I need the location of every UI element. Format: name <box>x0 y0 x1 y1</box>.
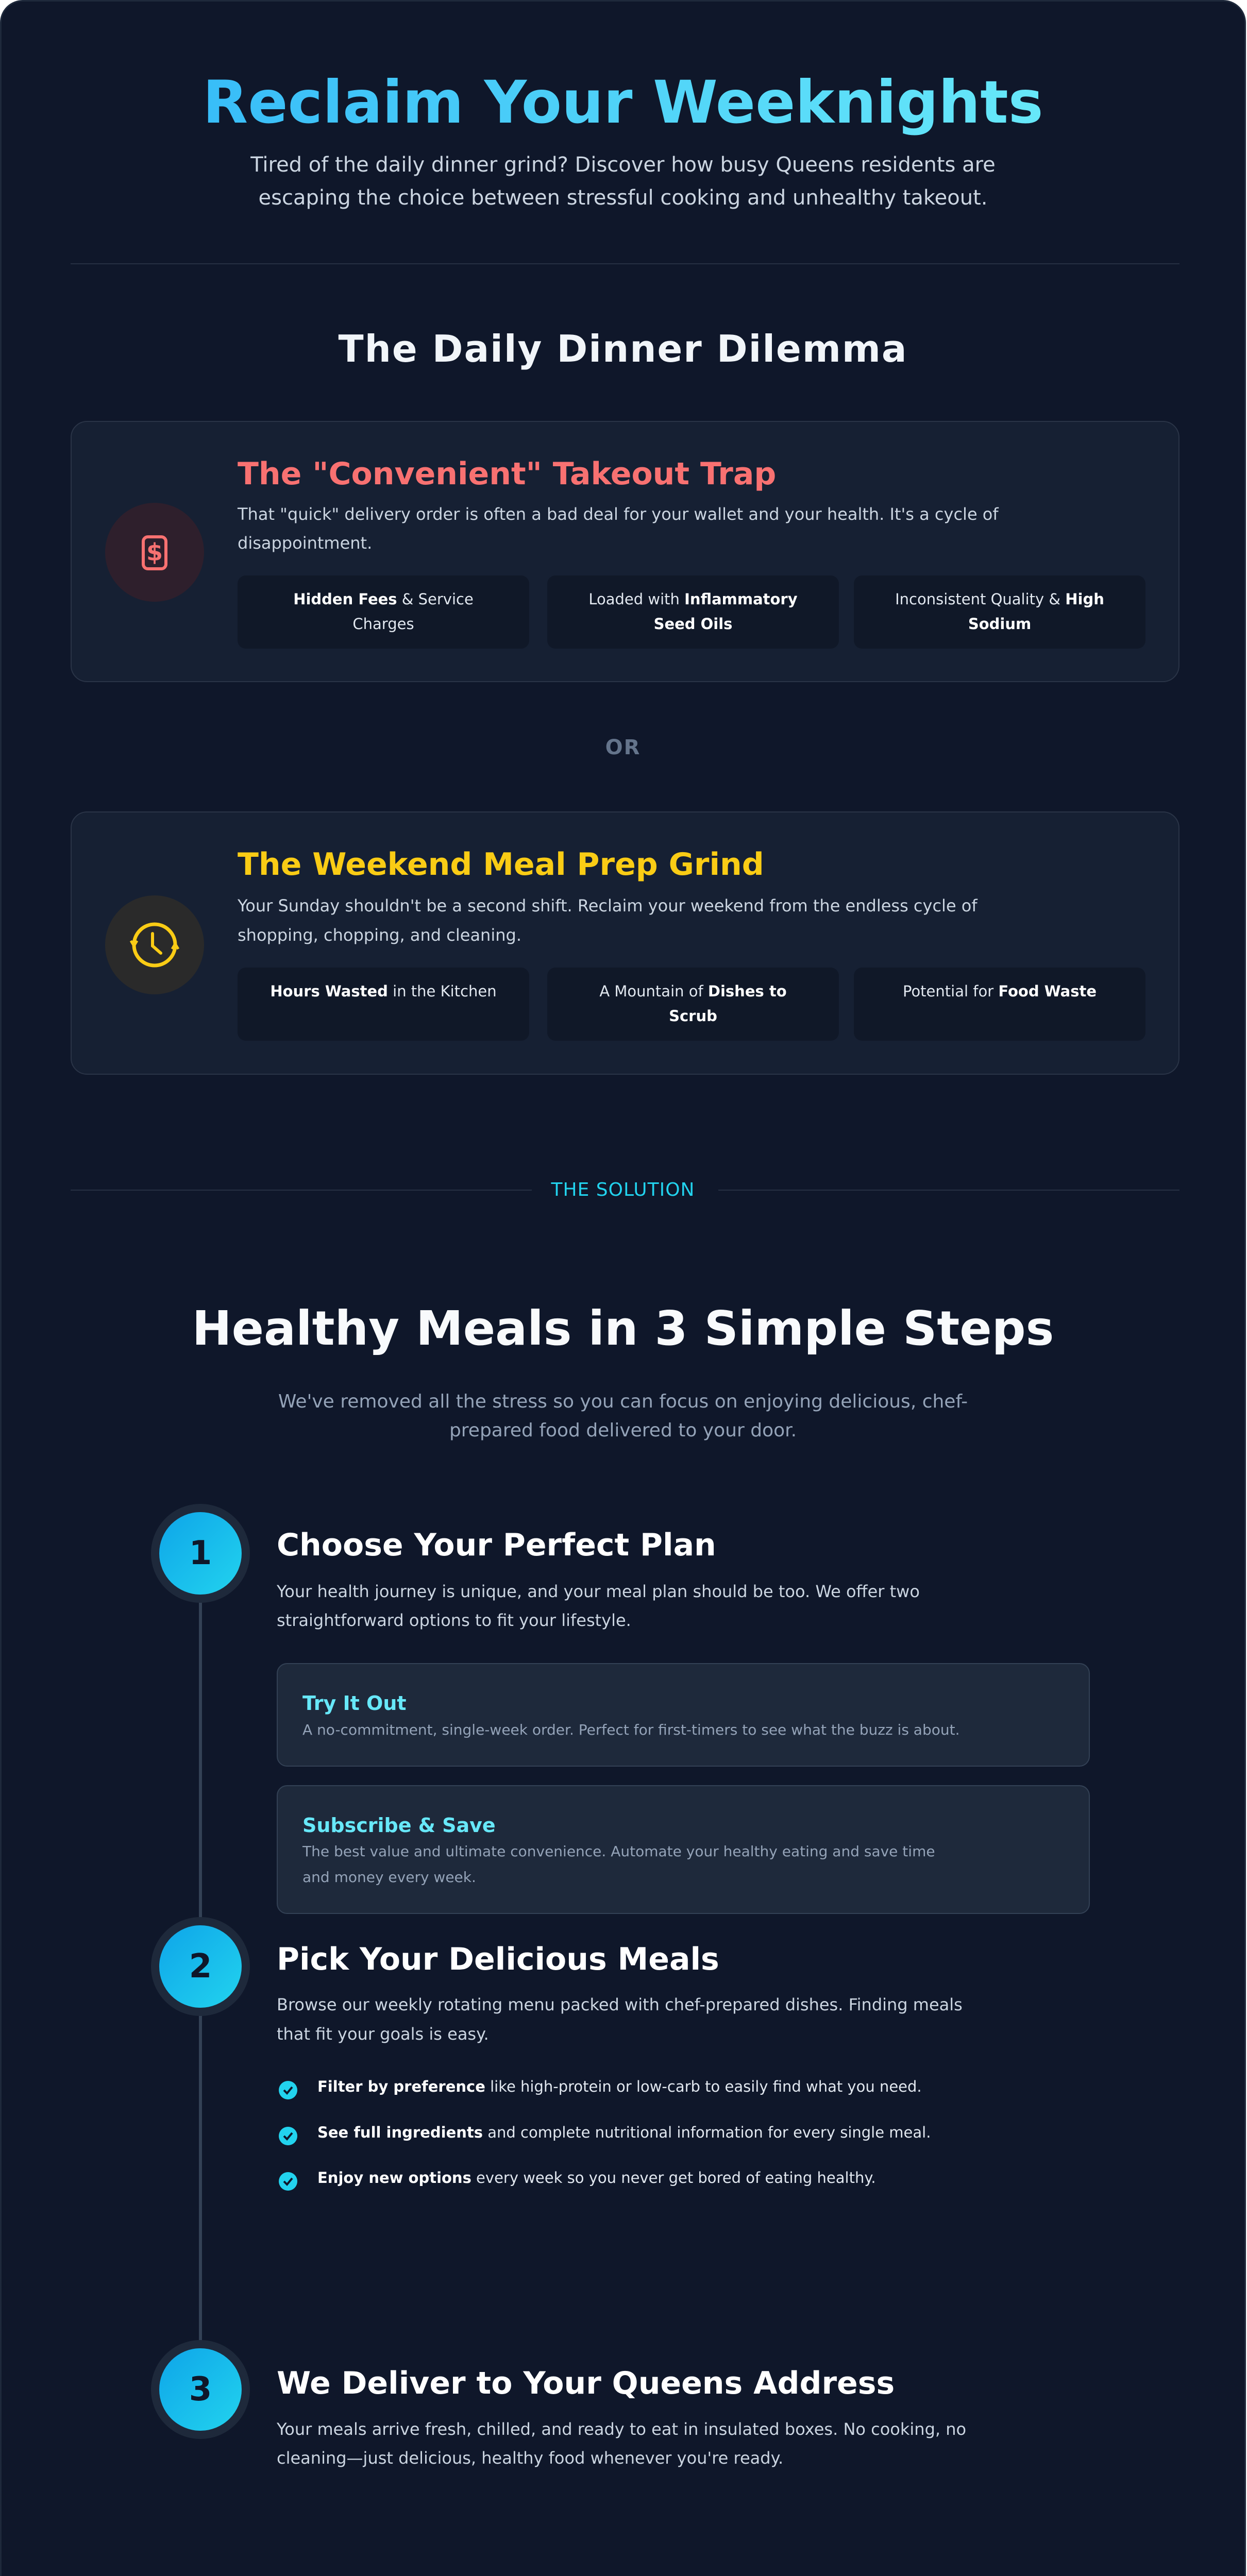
step 3 title: We Deliver to Your Queens Address <box>277 2365 895 2401</box>
pill: dishes: A Mountain of Dishes to <box>599 982 787 1000</box>
card text: That "quick" delivery order is often a bad deal for your wallet and your health. It's a cycle of <box>238 504 999 524</box>
steps subtitle: We've removed all the stress so you can focus on enjoying delicious, chef- <box>278 1391 968 1412</box>
card text: shopping, chopping, and cleaning. <box>238 925 521 945</box>
pill: waste: Potential for Food Waste <box>903 982 1097 1000</box>
step 3 <box>151 2340 966 2468</box>
option: subscribe: Subscribe & Save <box>302 1814 496 1837</box>
icon: phone with dollar <box>105 503 204 602</box>
card title: The Weekend Meal Prep Grind <box>238 846 764 883</box>
pill: hours <box>238 968 529 1041</box>
subtitle: escaping the choice between stressful cooking and unhealthy takeout. <box>259 186 987 210</box>
heading: steps: Healthy Meals in 3 Simple Steps <box>192 1301 1054 1356</box>
option: subscribe: The best value and ultimate convenience. Automate your healthy eating and save time <box>302 1843 935 1860</box>
card text: Your Sunday shouldn't be a second shift. Reclaim your weekend from the endless cycle of <box>238 896 978 916</box>
step number 1 <box>151 1504 250 1603</box>
pill: fees <box>238 575 529 649</box>
pill: seed oils <box>547 575 839 649</box>
step 3 text: cleaning—just delicious, healthy food whenever you're ready. <box>277 2448 783 2468</box>
panel: takeout trap <box>71 421 1179 682</box>
pill: waste <box>854 968 1145 1041</box>
card title: The "Convenient" Takeout Trap <box>238 456 776 492</box>
pill: seed oils: Seed Oils <box>654 615 732 633</box>
icon: phone with dollar: $ <box>146 538 163 566</box>
heading: dilemma: The Daily Dinner Dilemma <box>339 327 907 370</box>
steps subtitle: prepared food delivered to your door. <box>449 1420 797 1441</box>
option: try it out: Try It Out <box>302 1692 407 1715</box>
step 1 text: straightforward options to fit your lifestyle. <box>277 1611 631 1630</box>
step 2 text <box>277 1995 963 2044</box>
timeline line <box>199 1553 202 2389</box>
label: the solution: THE SOLUTION <box>551 1179 695 1200</box>
card text: disappointment. <box>238 533 372 553</box>
option: try it out: A no-commitment, single-week order. Perfect for first-timers to see what the buzz is about. <box>302 1721 959 1738</box>
pill: hours: Hours Wasted in the Kitchen <box>270 982 497 1000</box>
subtitle: Tired of the daily dinner grind? Discover how busy Queens residents are <box>250 153 996 177</box>
title: Reclaim Your Weeknights <box>203 68 1043 137</box>
pill: sodium: Sodium <box>968 615 1031 633</box>
step 2: Filter by preference like high-protein or low-carb to easily find what you need. <box>317 2078 922 2095</box>
step 1 <box>151 1504 1090 1914</box>
step number 3: 3 <box>189 2370 212 2409</box>
pill: fees: Hidden Fees & Service <box>293 590 474 608</box>
step 1 title: Choose Your Perfect Plan <box>277 1527 716 1563</box>
pill: dishes <box>547 968 839 1041</box>
step number 1: 1 <box>189 1534 212 1572</box>
step 2 title: Pick Your Delicious Meals <box>277 1941 719 1977</box>
pill: fees: Charges <box>352 615 414 633</box>
card text <box>237 504 999 553</box>
icon: clock <box>105 895 204 994</box>
option: subscribe <box>277 1785 1090 1914</box>
step 1 text: Your health journey is unique, and your meal plan should be too. We offer two <box>277 1582 920 1601</box>
option: subscribe: and money every week. <box>302 1869 476 1886</box>
pill: dishes: Scrub <box>669 1007 717 1025</box>
step 3 text <box>277 2419 966 2468</box>
panel: meal prep grind <box>71 811 1179 1075</box>
step number 2: 2 <box>189 1947 212 1986</box>
bullet 1 <box>279 2078 922 2099</box>
pill: sodium: Inconsistent Quality & High <box>895 590 1104 608</box>
pill: sodium <box>854 575 1145 649</box>
bullet 3 <box>279 2169 876 2191</box>
step 1 text <box>277 1582 920 1630</box>
step number 3 <box>151 2340 250 2439</box>
step 2 text: Browse our weekly rotating menu packed with chef-prepared dishes. Finding meals <box>277 1995 963 2014</box>
steps subtitle <box>278 1391 968 1441</box>
step 3 text: Your meals arrive fresh, chilled, and ready to eat in insulated boxes. No cooking, no <box>277 2419 966 2439</box>
option: try it out <box>277 1663 1090 1767</box>
step number 2 <box>151 1917 250 2016</box>
step 2 <box>151 1917 963 2191</box>
OR label: OR <box>605 736 641 759</box>
pill: seed oils: Loaded with Inflammatory <box>588 590 798 608</box>
step 2: Enjoy new options every week so you never get bored of eating healthy. <box>317 2169 876 2187</box>
step 2: See full ingredients and complete nutritional information for every single meal. <box>317 2124 931 2141</box>
bullet 2 <box>279 2124 931 2145</box>
step 2 text: that fit your goals is easy. <box>277 2024 489 2044</box>
subtitle <box>250 153 996 210</box>
card text <box>238 896 978 945</box>
